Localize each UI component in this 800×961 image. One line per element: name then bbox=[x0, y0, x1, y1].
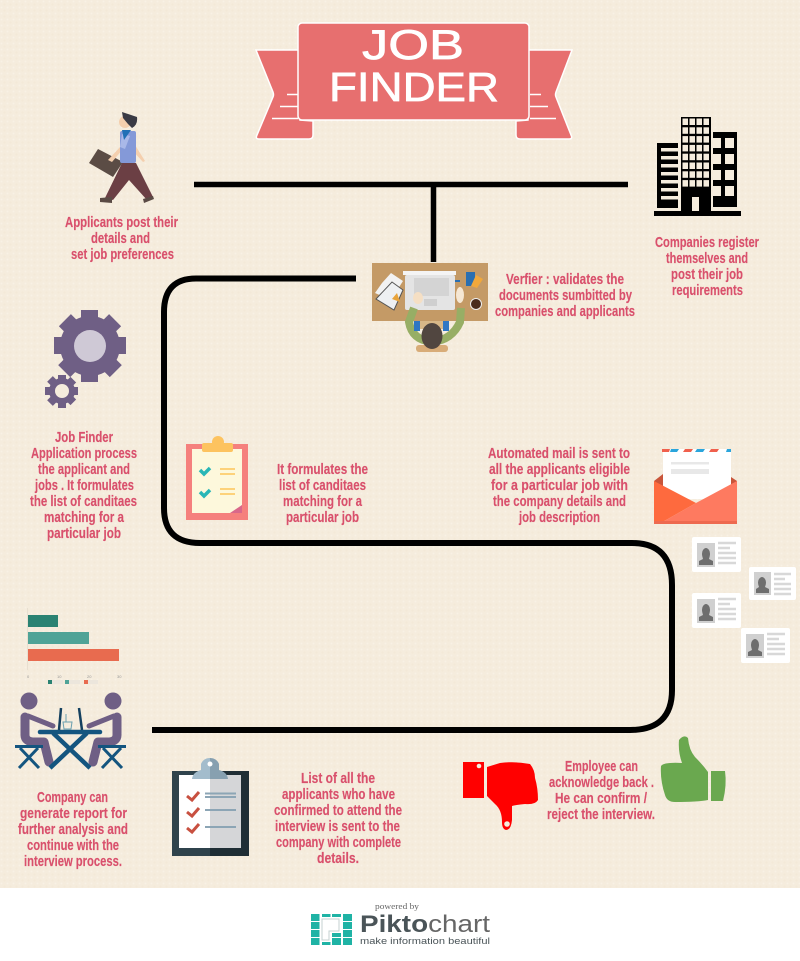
text: list formulated: matching for a bbox=[283, 493, 362, 510]
icon: thumbs up bbox=[661, 736, 726, 802]
text: confirmed list: confirmed to attend the bbox=[274, 802, 402, 819]
text: job finder application: particular job bbox=[47, 525, 121, 542]
text: company report: Company can bbox=[37, 789, 108, 806]
icon: checklist clipboard bbox=[186, 436, 248, 520]
text: job finder application: matching for a bbox=[44, 509, 124, 526]
text: companies: Companies register bbox=[655, 234, 759, 251]
text: companies: post their job bbox=[671, 266, 743, 283]
text: applicants: set job preferences bbox=[71, 246, 174, 263]
text: employee acknowledgement bbox=[547, 758, 655, 823]
text: employee acknowledgement: acknowledge back . bbox=[549, 774, 654, 791]
icon: gears bbox=[45, 310, 126, 408]
title banner bbox=[256, 21, 572, 139]
icon: open envelope bbox=[654, 449, 737, 524]
title banner: JOB bbox=[362, 21, 464, 68]
text: employee acknowledgement: He can confirm / bbox=[555, 790, 648, 807]
icons: applicant resume cards bbox=[692, 537, 796, 663]
text: automated mail: the company details and bbox=[493, 493, 626, 510]
text: confirmed list bbox=[274, 770, 402, 867]
text: automated mail: Automated mail is sent to bbox=[488, 445, 630, 462]
text: automated mail: for a particular job with bbox=[491, 477, 628, 494]
text: companies bbox=[655, 234, 759, 299]
text: verifier bbox=[495, 271, 635, 320]
text: companies: themselves and bbox=[666, 250, 748, 267]
text: job finder application: the applicant and bbox=[38, 461, 130, 478]
text: companies: requirements bbox=[672, 282, 743, 299]
text: applicants: details and bbox=[91, 230, 150, 247]
text: job finder application bbox=[30, 429, 137, 542]
bar chart: 30 bbox=[117, 674, 122, 679]
text: job finder application: the list of canditaes bbox=[30, 493, 137, 510]
text: job finder application: jobs . It formulates bbox=[34, 477, 134, 494]
text: automated mail bbox=[488, 445, 630, 526]
text: company report: generate report for bbox=[20, 805, 127, 822]
text: confirmed list: applicants who have bbox=[282, 786, 395, 803]
text: company report: continue with the bbox=[27, 837, 119, 854]
footer bbox=[0, 888, 800, 961]
bar chart: 10 bbox=[57, 674, 62, 679]
text: automated mail: job description bbox=[518, 509, 600, 526]
text: confirmed list: company with complete bbox=[276, 834, 401, 851]
text: employee acknowledgement: Employee can bbox=[565, 758, 638, 775]
text: verifier: documents sumbitted by bbox=[499, 287, 632, 304]
text: employee acknowledgement: reject the interview. bbox=[547, 806, 655, 823]
text: company report: interview process. bbox=[24, 853, 122, 870]
text: verifier: Verfier : validates the bbox=[506, 271, 624, 288]
text: confirmed list: interview is sent to the bbox=[275, 818, 400, 835]
icon: verifier at desk bbox=[372, 263, 488, 352]
text: confirmed list: details. bbox=[317, 850, 359, 867]
icon: confirmed list clipboard bbox=[172, 758, 249, 856]
text: job finder application: Job Finder bbox=[55, 429, 113, 446]
text: automated mail: all the applicants eligible bbox=[489, 461, 630, 478]
title banner: FINDER bbox=[329, 64, 499, 110]
text: company report: further analysis and bbox=[18, 821, 128, 838]
icon: applicant walking with briefcase bbox=[89, 112, 154, 203]
text: list formulated bbox=[277, 461, 368, 526]
text: powered by: powered by bbox=[375, 901, 420, 911]
text: tagline: make information beautiful bbox=[360, 936, 490, 947]
connector: top branch bbox=[194, 184, 628, 262]
icon: thumbs down bbox=[463, 762, 538, 830]
bar chart: 20 bbox=[87, 674, 92, 679]
bar chart bbox=[27, 608, 122, 684]
text: list formulated: list of canditaes bbox=[279, 477, 366, 494]
bar chart: 0 bbox=[27, 674, 30, 679]
text: list formulated: particular job bbox=[286, 509, 359, 526]
connector: winding process path bbox=[152, 278, 672, 730]
icon: piktochart logo bbox=[311, 914, 352, 945]
icon: office buildings bbox=[654, 117, 741, 216]
text: company report bbox=[18, 789, 128, 870]
text: piktochart wordmark: Pikto chart bbox=[360, 911, 490, 938]
text: verifier: companies and applicants bbox=[495, 303, 635, 320]
text: job finder application: Application process bbox=[31, 445, 137, 462]
text: list formulated: It formulates the bbox=[277, 461, 368, 478]
text: applicants: Applicants post their bbox=[65, 214, 178, 231]
text: applicants bbox=[65, 214, 178, 263]
text: confirmed list: List of all the bbox=[301, 770, 375, 787]
icon: interview meeting bbox=[15, 692, 126, 768]
